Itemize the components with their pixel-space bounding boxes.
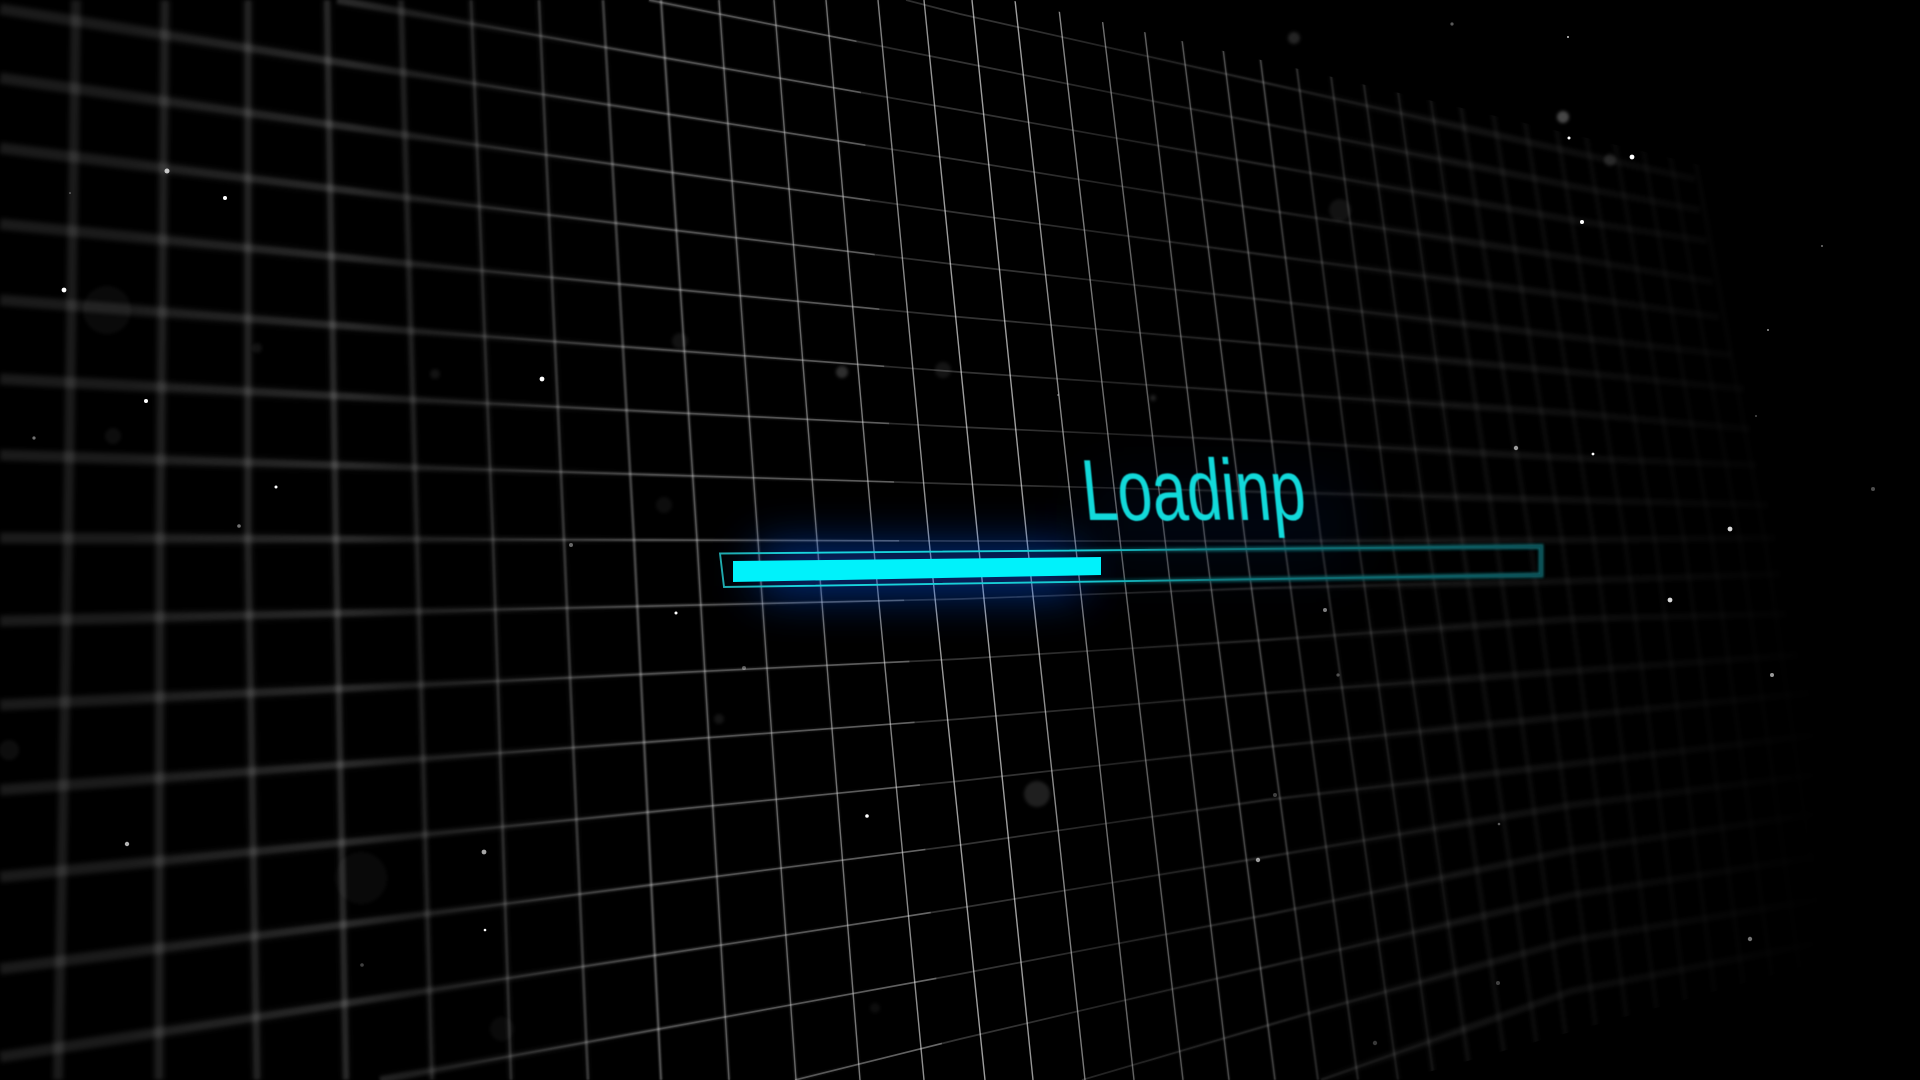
progress bar frame bbox=[720, 546, 1541, 587]
progress bar glow bbox=[760, 480, 1350, 590]
progress bar fill bbox=[733, 557, 1101, 582]
label: Loadinp: Loadinp bbox=[1077, 442, 1310, 539]
out-of-focus dust bbox=[0, 32, 1616, 1041]
